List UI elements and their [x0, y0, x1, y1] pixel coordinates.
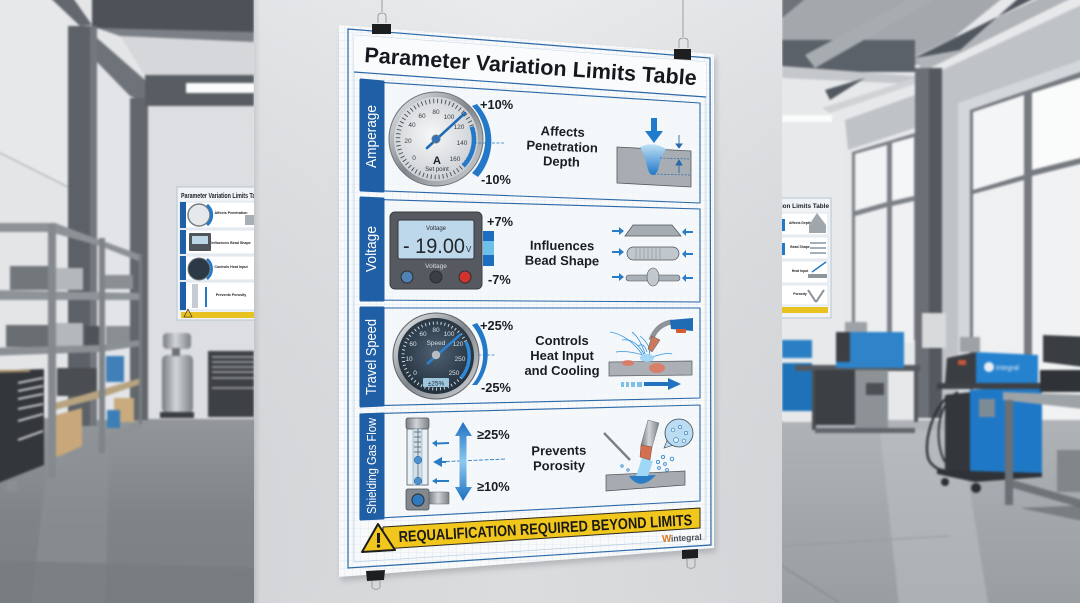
lower limit: -25%	[481, 380, 511, 395]
banner bar	[383, 508, 700, 549]
dial numbers: 60	[409, 341, 417, 348]
unit: V	[466, 245, 472, 254]
ticks	[403, 323, 469, 389]
poster drop shadow	[341, 29, 716, 581]
small arrows	[676, 135, 682, 173]
background mini poster right: Bead Shape	[790, 245, 810, 249]
weld pool	[629, 475, 656, 484]
background grid	[339, 25, 714, 577]
digital meter	[390, 212, 482, 289]
dial numbers: 140	[457, 140, 468, 147]
binder clip bottom right	[682, 549, 698, 568]
dial numbers: 80	[432, 327, 440, 334]
setpoint line	[474, 142, 504, 144]
needle	[427, 334, 461, 364]
description	[525, 238, 599, 268]
meter body	[390, 212, 482, 289]
torch handle	[670, 318, 693, 331]
description: Influences	[530, 238, 594, 253]
screen label: Voltage	[426, 226, 447, 232]
background mini poster left: Influences Bead Shape	[211, 241, 251, 245]
side label	[361, 80, 383, 191]
plate	[617, 147, 691, 187]
description	[524, 333, 600, 378]
description: Heat Input	[530, 348, 594, 363]
upper limit: +7%	[487, 214, 514, 229]
bezel	[393, 313, 479, 399]
dial numbers: 100	[444, 331, 455, 338]
dial label: Speed	[427, 340, 446, 347]
description: Bead Shape	[525, 253, 599, 268]
side fitting	[429, 492, 449, 504]
outer border	[348, 29, 711, 568]
description: Controls	[535, 333, 589, 348]
panel frame	[360, 81, 700, 203]
dial numbers: 80	[432, 109, 440, 116]
description	[531, 443, 587, 473]
dial numbers: 60	[419, 331, 427, 338]
background mini poster left: Prevents Porosity	[216, 293, 246, 297]
brand logo: W	[662, 533, 672, 545]
gauge bezel	[389, 92, 483, 186]
dial numbers: 10	[405, 356, 413, 363]
dial numbers	[405, 327, 466, 377]
direction arrow	[621, 378, 681, 390]
side label	[361, 308, 383, 406]
lower limit: -7%	[488, 272, 511, 287]
gauge	[389, 92, 504, 186]
dial numbers: 160	[450, 156, 461, 163]
unit: A	[433, 155, 441, 167]
background mini poster right: Heat Input	[792, 269, 809, 273]
background mini poster right	[730, 198, 831, 318]
filler rod	[604, 433, 630, 460]
sparks	[610, 332, 672, 358]
band 120-160	[463, 127, 474, 166]
flow markers	[432, 440, 506, 484]
needle	[427, 113, 465, 148]
dial numbers: 120	[453, 341, 464, 348]
icon: welding torch	[609, 318, 693, 390]
description: Prevents	[531, 443, 586, 458]
brand logo: integral	[671, 532, 702, 543]
inner tube	[413, 429, 422, 485]
dial numbers: 250	[449, 370, 460, 377]
background mini poster right: Affects Depth	[789, 221, 811, 225]
narrow bead	[626, 268, 680, 286]
brand logo	[662, 532, 702, 545]
description: Porosity	[533, 458, 586, 473]
dial numbers: 20	[404, 138, 412, 145]
heat glow	[622, 360, 665, 373]
control label: Voltage	[425, 263, 447, 270]
flat bead	[625, 225, 681, 236]
background mini poster left: Controls Heat Input	[214, 265, 248, 269]
label text: Travel Speed	[364, 319, 380, 395]
icon: weld penetration	[617, 118, 691, 187]
panel: travel speed	[360, 308, 700, 406]
reading: - 19.00	[403, 235, 465, 258]
background mini poster left: Affects Penetration	[215, 211, 247, 215]
binder clip top right	[674, 0, 691, 60]
panel: voltage	[360, 198, 700, 302]
poster sheet	[339, 25, 714, 577]
binder clip top left	[372, 0, 391, 34]
panel frame	[360, 405, 700, 519]
lower limit: -10%	[481, 172, 511, 187]
description: Affects	[540, 123, 585, 140]
description: and Cooling	[524, 363, 600, 378]
dark face	[398, 318, 474, 394]
binder clip bottom left	[366, 570, 385, 589]
panel frame	[360, 308, 700, 406]
gas droplets	[621, 455, 674, 471]
base knob	[412, 494, 424, 506]
flowmeter	[406, 418, 449, 510]
side arrows	[612, 227, 693, 282]
weld bead	[640, 144, 666, 175]
scale	[414, 432, 421, 452]
torch nozzle	[648, 336, 660, 352]
background mini poster left: Parameter Variation Limits Table	[181, 191, 263, 200]
tolerance arc	[472, 104, 491, 177]
plate	[609, 361, 692, 376]
dial numbers: 0	[413, 370, 417, 377]
background mini poster right: Porosity	[793, 292, 807, 296]
background: workshop right side	[780, 0, 1080, 603]
porosity callout	[664, 419, 693, 448]
icon: bead shapes	[612, 225, 693, 286]
lower limit: ≥10%	[477, 479, 510, 494]
force arrow	[645, 118, 663, 143]
dial numbers: 40	[408, 122, 416, 129]
rippled bead	[627, 247, 679, 260]
title band	[354, 35, 706, 97]
floats	[414, 456, 422, 485]
torch tip	[640, 445, 652, 460]
plate	[606, 471, 685, 491]
tolerance bar	[483, 231, 494, 266]
upper limit: +10%	[480, 97, 514, 112]
banner text: REQUALIFICATION REQUIRED BEYOND LIMITS	[398, 512, 693, 546]
panel: amperage	[360, 80, 700, 203]
background mini poster left	[177, 187, 263, 320]
base	[406, 489, 429, 510]
description	[525, 123, 599, 170]
tolerance arc	[472, 323, 488, 385]
title: Parameter Variation Limits Table	[364, 43, 698, 90]
description: Depth	[543, 153, 580, 170]
upper limit: ≥25%	[477, 427, 510, 442]
screen	[398, 220, 474, 259]
setpoint line	[478, 354, 496, 356]
description: Penetration	[526, 138, 598, 155]
background: workshop right side: integral	[996, 365, 1019, 372]
dial numbers: 0	[412, 155, 416, 162]
side label	[361, 414, 383, 519]
top cap	[406, 418, 429, 429]
gas cone	[636, 458, 653, 476]
gauge	[393, 313, 496, 399]
stem	[417, 429, 419, 483]
double arrow	[455, 422, 472, 501]
readout: ±25%	[428, 380, 445, 388]
dial numbers: 60	[418, 113, 426, 120]
label text: Shielding Gas Flow	[364, 417, 379, 514]
dial numbers: 120	[454, 124, 465, 131]
knobs	[401, 271, 471, 283]
label text: Voltage	[364, 226, 380, 272]
gauge face	[394, 97, 478, 181]
central wall	[254, 0, 782, 603]
warning banner	[362, 508, 700, 552]
dial numbers: 250	[455, 356, 466, 363]
dial numbers: 100	[444, 114, 455, 121]
set point: Set point	[425, 167, 449, 173]
glass tube	[407, 429, 428, 485]
depth lines	[654, 158, 690, 175]
panel: shielding gas flow	[360, 405, 700, 519]
inner thin border	[354, 35, 706, 562]
background: workshop left side	[0, 0, 260, 603]
icon: shielding gas	[604, 419, 693, 491]
torch neck	[651, 322, 672, 340]
ticks	[398, 101, 474, 177]
title rule	[354, 72, 706, 97]
torch body	[641, 420, 659, 447]
panel frame	[360, 199, 700, 302]
upper limit: +25%	[480, 318, 514, 333]
dial numbers	[404, 109, 468, 163]
side label	[361, 198, 383, 300]
background mini poster right: Parameter Variation Limits Table	[730, 203, 829, 210]
label text: Amperage	[364, 105, 380, 168]
poster	[339, 25, 714, 577]
icon: warning triangle	[362, 524, 395, 552]
